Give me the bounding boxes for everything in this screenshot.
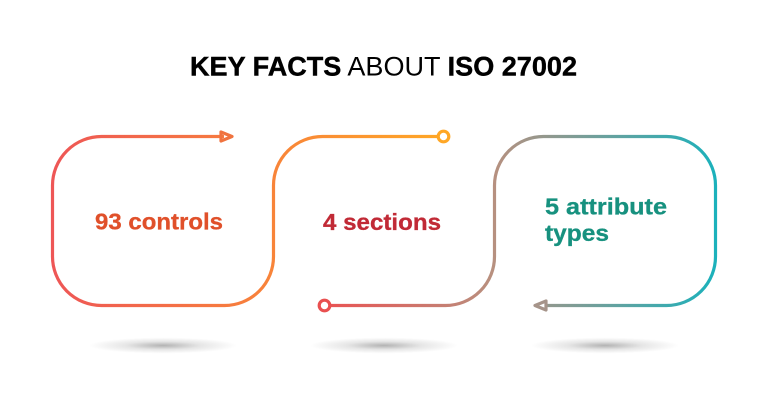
icon: arrow head right xyxy=(221,132,232,141)
label: 4 sections: 4 sections xyxy=(323,209,441,235)
label: 5 attribute types: types xyxy=(545,220,609,246)
label: 5 attribute types xyxy=(545,194,667,246)
icon: circle end bottom xyxy=(319,300,330,311)
icon: circle end top xyxy=(438,131,449,142)
icon: arrow head left xyxy=(535,301,546,310)
connector: second loop with circle and arrow end xyxy=(319,136,716,311)
shadow: first xyxy=(89,338,237,354)
shadow: second xyxy=(310,338,458,354)
label: 5 attribute types: 5 attribute xyxy=(545,194,667,220)
title: KEY FACTS ABOUT ISO 27002 xyxy=(190,52,577,82)
connector: first loop with arrow and circle end xyxy=(52,131,449,306)
shadow: third xyxy=(531,338,679,354)
label: 93 controls: 93 controls xyxy=(95,208,223,234)
